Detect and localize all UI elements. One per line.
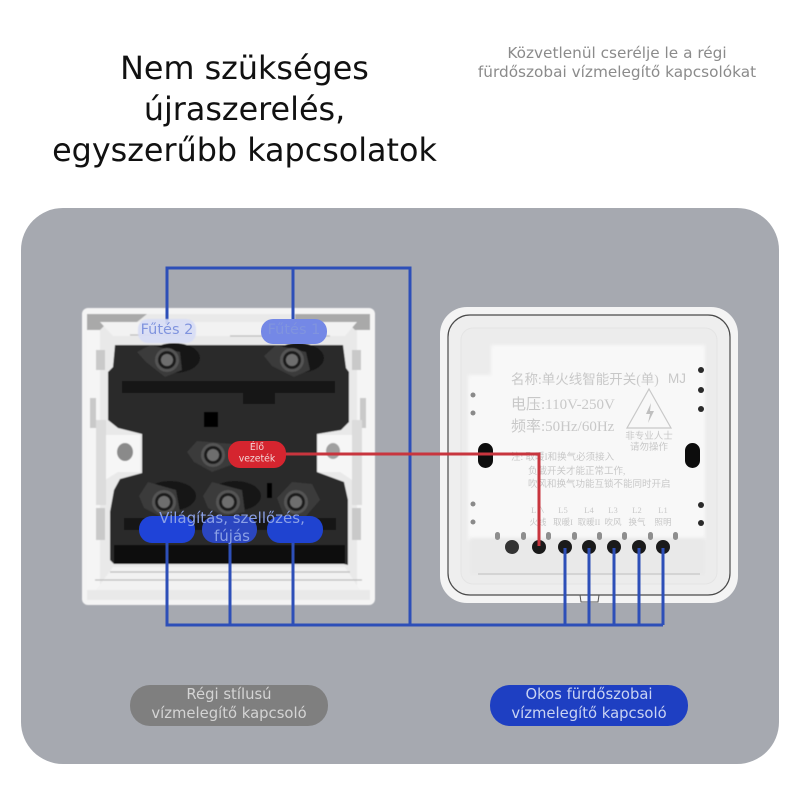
label: live wire: vezeték — [239, 454, 276, 464]
notes: 吹风和换气功能互锁不能同时开启 — [528, 478, 671, 490]
label: Fűtés 1: Fűtés 1 — [268, 322, 320, 338]
terminal labels: 取暖I — [553, 517, 573, 527]
screws — [137, 343, 200, 377]
terminal holes — [505, 540, 670, 554]
button: old switch: vízmelegítő kapcsoló — [151, 705, 307, 722]
black body — [108, 345, 349, 565]
mounting slots — [478, 443, 493, 468]
subtitle — [478, 44, 756, 81]
terminal labels: L5 — [558, 505, 568, 515]
product label text: 频率:50Hz/60Hz — [511, 418, 615, 435]
button: old switch — [130, 685, 328, 726]
terminal labels: L3 — [608, 505, 618, 515]
label: Fűtés 1 — [261, 319, 327, 344]
blue wires — [167, 268, 663, 625]
warning triangle: 请勿操作 — [630, 441, 668, 453]
notes — [511, 451, 671, 490]
title: Nem szükséges — [120, 50, 369, 87]
button: smart switch — [490, 685, 688, 726]
notes: 负载开关才能正常工作, — [528, 465, 625, 477]
product label text — [511, 371, 686, 435]
product label text: MJ — [668, 371, 686, 386]
label: lighting, ventilation, blowing: fújás — [214, 527, 250, 545]
side notches — [698, 367, 704, 526]
subtitle: Közvetlenül cserélje le a régi — [507, 44, 727, 62]
label: live wire — [228, 441, 286, 468]
terminal labels: L4 — [584, 505, 594, 515]
label: Fűtés 2: Fűtés 2 — [141, 322, 193, 338]
terminal labels: 火线 — [529, 517, 547, 527]
label: live wire: Élő — [250, 441, 264, 453]
terminal labels: L∧ — [531, 505, 545, 515]
panel background — [21, 208, 779, 764]
subtitle: fürdőszobai vízmelegítő kapcsolókat — [478, 63, 756, 81]
button: smart switch: Okos fürdőszobai — [525, 686, 653, 703]
product label text: 电压:110V-250V — [511, 396, 615, 413]
smart switch — [440, 307, 738, 603]
terminal labels: 换气 — [628, 517, 646, 527]
product label text: 名称:单火线智能开关(单) — [511, 372, 659, 387]
terminal labels — [529, 505, 672, 527]
warning triangle — [625, 389, 673, 453]
terminal labels: 照明 — [654, 517, 672, 527]
button: smart switch: vízmelegítő kapcsoló — [511, 705, 667, 722]
label: lighting, ventilation, blowing — [139, 509, 323, 545]
label: lighting, ventilation, blowing: Világítás, szellőzés, — [159, 509, 305, 527]
terminal labels: 吹风 — [604, 517, 622, 527]
notes: 注: 取暖I和换气必须接入 — [511, 451, 615, 463]
title: egyszerűbb kapcsolatok — [52, 132, 437, 169]
terminal labels: 取暖II — [578, 517, 600, 527]
mounting holes — [117, 443, 133, 461]
title: újraszerelés, — [144, 91, 345, 128]
title — [52, 50, 437, 169]
terminal labels: L1 — [658, 505, 668, 515]
button: old switch: Régi stílusú — [186, 686, 272, 703]
label: Fűtés 2 — [138, 319, 196, 343]
red live wire — [285, 454, 539, 546]
warning triangle: 非专业人士 — [625, 430, 673, 442]
terminal labels: L2 — [632, 505, 642, 515]
old switch — [82, 308, 375, 605]
